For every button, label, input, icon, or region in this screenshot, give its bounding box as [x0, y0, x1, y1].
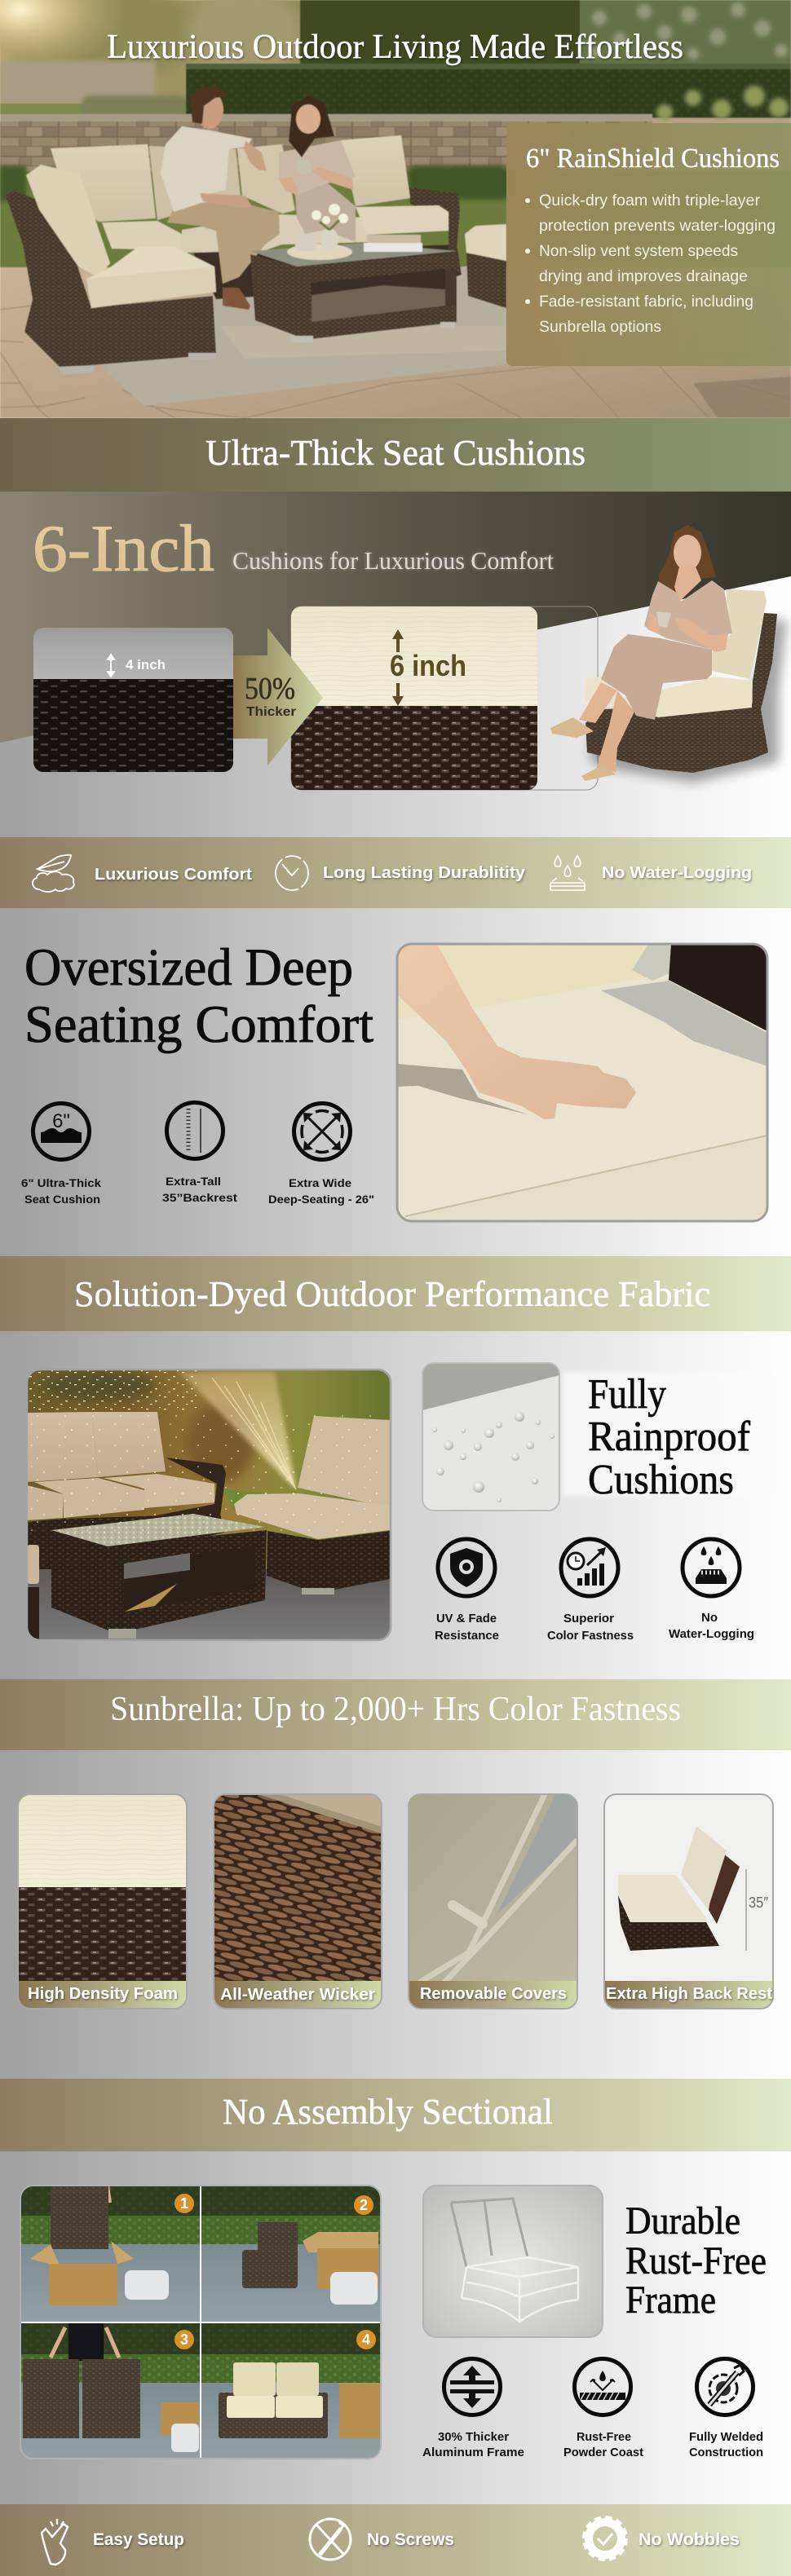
icon: welded gear and wrench	[696, 2359, 753, 2415]
label: powder coast	[563, 2430, 643, 2459]
arrow: 50% thicker: Thicker	[246, 705, 296, 719]
band: comfort, durability, no water-logging	[0, 837, 791, 908]
band: solution-dyed outdoor performance fabric	[0, 1256, 791, 1331]
label: superior color fastness: Color Fastness	[547, 1629, 634, 1643]
band: no assembly sectional	[0, 2079, 791, 2151]
bullet list: drying and improves drainage	[539, 267, 748, 285]
label: UV and fade resistance: Resistance	[435, 1629, 499, 1643]
band: setup benefits	[0, 2504, 791, 2576]
icon: UV shield	[438, 1539, 495, 1596]
icon: water drops on cushion	[550, 856, 585, 890]
heading: durable rust-free frame: Durable	[625, 2199, 740, 2243]
panel: oversized deep seating comfort	[0, 908, 791, 1256]
heading: fully rainproof cushions: Cushions	[588, 1457, 734, 1503]
heading: oversized deep seating comfort: Oversized Deep	[24, 938, 353, 997]
band: sunbrella color fastness	[0, 1679, 791, 1750]
icon: feather over cloud	[33, 855, 74, 892]
panel: rainproof fabric	[0, 1331, 791, 1679]
label: no screws: No Screws	[367, 2530, 454, 2549]
label: superior color fastness: Superior	[563, 1612, 614, 1625]
arrow: 50% thicker: 50%	[245, 672, 295, 706]
card: extra high back rest: 35″	[749, 1895, 769, 1911]
card: all-weather wicker	[214, 1792, 382, 2009]
band: sunbrella color fastness: Sunbrella: Up to 2,000+ Hrs Color Fastness	[110, 1691, 681, 1728]
label: no water-logging: No	[701, 1611, 718, 1625]
icon: tape measure backrest	[166, 1102, 223, 1159]
heading: durable rust-free frame: Frame	[625, 2278, 716, 2322]
panel: feature cards	[0, 1750, 791, 2080]
label: extra-tall backrest: 35”Backrest	[162, 1191, 237, 1204]
label: fully welded construction	[689, 2430, 763, 2459]
band: no assembly sectional: No Assembly Sectional	[223, 2092, 553, 2132]
step badges: 2	[360, 2197, 368, 2213]
label: aluminum frame: 30% Thicker	[438, 2430, 509, 2444]
step 4	[201, 2323, 381, 2459]
swatch: 4 inch cushion: 4 inch	[126, 657, 166, 673]
icon: color fastness chart	[561, 1539, 618, 1596]
woman	[295, 183, 356, 242]
icon: no screws	[310, 2519, 351, 2560]
chair, left	[6, 191, 216, 369]
bullet list	[525, 192, 776, 336]
step 1	[20, 2186, 200, 2322]
label: no wobbles: No Wobbles	[639, 2530, 740, 2549]
label: luxurious comfort: Luxurious Comfort	[95, 866, 252, 884]
label: ultra-thick seat cushion: Seat Cushion	[24, 1193, 100, 1206]
panel: assembly and frame	[0, 2151, 791, 2504]
panel: RainShield cushions	[506, 123, 791, 366]
label: ultra-thick seat cushion	[21, 1176, 101, 1206]
swatch: 6 inch cushion: 6 inch	[390, 649, 466, 682]
card: removable covers	[409, 1794, 577, 2009]
label: extra wide deep-seating: Deep-Seating - 26"	[268, 1193, 374, 1206]
label: extra-tall backrest	[162, 1175, 237, 1204]
card: extra high back rest	[604, 1794, 773, 2009]
bullet list: Fade-resistant fabric, including	[539, 293, 753, 311]
photo: hand pressing cushion	[397, 944, 767, 1221]
heading: fully rainproof cushions: Fully	[588, 1371, 666, 1418]
icon: pointing hand	[42, 2519, 68, 2565]
heading: fully rainproof cushions: Rainproof	[588, 1414, 751, 1460]
label: ultra-thick seat cushion: 6" Ultra-Thick	[21, 1176, 101, 1189]
icon: 6 inch cushion: 6"	[52, 1110, 70, 1132]
step badges: 4	[362, 2331, 370, 2348]
heading: durable rust-free frame: Rust-Free	[625, 2239, 767, 2283]
step badges: 1	[180, 2195, 188, 2212]
bullet list: Sunbrella options	[539, 318, 661, 336]
icon: clock	[276, 856, 308, 890]
swatch: 4 inch cushion	[33, 628, 233, 773]
heading: fully rainproof cushions	[588, 1371, 751, 1503]
bullet list: Non-slip vent system speeds	[539, 242, 738, 260]
icon: powder coat	[574, 2359, 631, 2415]
label: superior color fastness	[547, 1612, 634, 1643]
icon: water through vents	[683, 1539, 740, 1596]
label: easy setup: Easy Setup	[93, 2530, 184, 2549]
card: high density foam	[18, 1794, 187, 2009]
heading: oversized deep seating comfort	[24, 938, 373, 1054]
man	[167, 201, 280, 284]
heading: durable rust-free frame	[625, 2199, 767, 2322]
label: fully welded construction: Fully Welded	[689, 2430, 763, 2444]
ottoman	[466, 253, 506, 308]
panel: 6-inch cushion comparison	[0, 492, 791, 837]
photo: aluminum frame	[423, 2186, 603, 2337]
step badges: 3	[180, 2331, 188, 2348]
hero title: Luxurious Outdoor Living Made Effortless	[107, 29, 683, 66]
icon: 6 inch cushion	[33, 1104, 90, 1159]
sofa base and arm	[193, 245, 462, 299]
card: all-weather wicker: All-Weather Wicker	[220, 1986, 375, 2004]
label: powder coast: Rust-Free	[577, 2430, 631, 2444]
band: ultra-thick seat cushions	[0, 418, 791, 492]
step 3	[20, 2323, 200, 2459]
label: extra wide deep-seating: Extra Wide	[289, 1176, 351, 1189]
icon: gear check	[585, 2518, 625, 2559]
heading: 6 inch RainShield cushions: 6" RainShield Cushions	[526, 143, 780, 174]
band: solution-dyed outdoor performance fabric: Solution-Dyed Outdoor Performance Fabric	[74, 1274, 710, 1314]
swatch: 6 inch cushion	[291, 607, 598, 791]
bullet list: protection prevents water-logging	[539, 217, 776, 235]
label: UV and fade resistance: UV & Fade	[436, 1612, 497, 1625]
label: no water-logging: No Water-Logging	[602, 864, 752, 882]
bullet list: Quick-dry foam with triple-layer	[539, 192, 761, 210]
heading: 6-Inch: 6-Inch	[33, 511, 214, 585]
label: aluminum frame	[422, 2430, 524, 2459]
card: high density foam: High Density Foam	[28, 1985, 178, 2003]
hero photo: couple on wicker sectional	[0, 0, 791, 418]
label: fully welded construction: Construction	[689, 2446, 763, 2459]
label: UV and fade resistance	[435, 1612, 499, 1643]
label: powder coast: Powder Coast	[563, 2446, 643, 2459]
band: ultra-thick seat cushions: Ultra-Thick Seat Cushions	[205, 433, 586, 473]
step badges	[175, 2194, 376, 2349]
label: no water-logging: Water-Logging	[669, 1627, 754, 1641]
label: aluminum frame: Aluminum Frame	[422, 2446, 524, 2459]
label: extra wide deep-seating	[268, 1176, 374, 1206]
card: removable covers: Removable Covers	[420, 1985, 567, 2003]
icon: thicker frame	[444, 2359, 501, 2415]
subheading: Cushions for Luxurious Comfort	[232, 546, 554, 575]
label: extra-tall backrest: Extra-Tall	[166, 1175, 221, 1188]
icon: expansion arrows	[294, 1104, 351, 1159]
heading: oversized deep seating comfort: Seating Comfort	[24, 995, 373, 1054]
card: extra high back rest: Extra High Back Rest	[606, 1985, 772, 2003]
photo grid: four assembly steps	[20, 2186, 381, 2459]
photo: woman seated on wicker chair	[550, 525, 787, 783]
label: no water-logging	[669, 1611, 754, 1641]
label: long lasting durability: Long Lasting Durablitity	[323, 864, 526, 882]
step 2	[201, 2186, 381, 2322]
arrow: 50% thicker	[233, 628, 323, 765]
photo: water sprayed over wicker set	[27, 1370, 391, 1643]
photo: water beads on fabric	[422, 1362, 670, 1511]
coffee table	[250, 254, 298, 337]
